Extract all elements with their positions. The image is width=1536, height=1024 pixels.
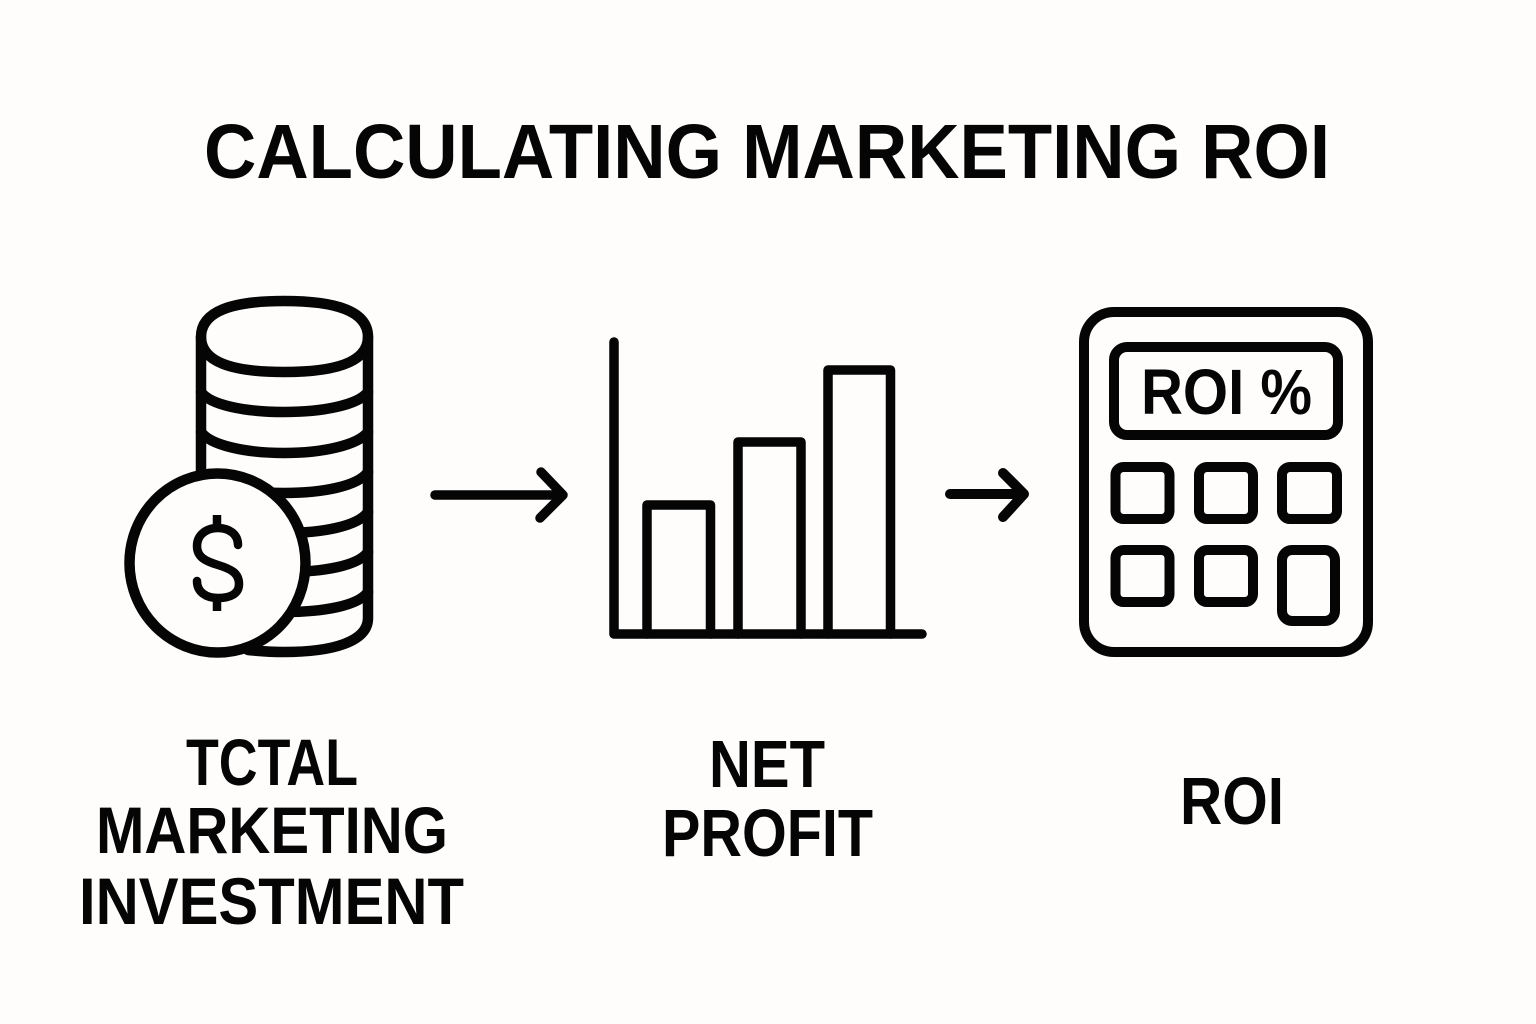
label: net profit: NET [709,727,825,802]
label: ROI: ROI [1180,764,1284,839]
calculator buttons [1116,467,1337,621]
chart axes [614,342,922,634]
calculator body [1084,312,1368,652]
label: total marketing investment: MARKETING [96,793,448,867]
label: total marketing investment [79,725,464,938]
label: total marketing investment: TCTAL [186,725,358,799]
label: net profit: PROFIT [662,796,873,871]
label: total marketing investment: INVESTMENT [79,864,464,938]
icon: calculator [1084,312,1368,652]
title: CALCULATING MARKETING ROI [204,109,1330,195]
icon: bar chart [614,342,922,634]
label: net profit [662,727,873,871]
bar: medium [738,442,801,634]
dollar coin [130,474,306,652]
icon: coin stack with dollar coin [130,301,368,652]
bar: small [647,505,710,634]
bar: tall [828,370,890,634]
calculator display: ROI % [1141,356,1312,428]
coin stack [201,301,368,652]
arrow: net profit to ROI [950,473,1024,517]
calculator display [1114,347,1338,435]
arrow: investment to net profit [435,472,563,518]
